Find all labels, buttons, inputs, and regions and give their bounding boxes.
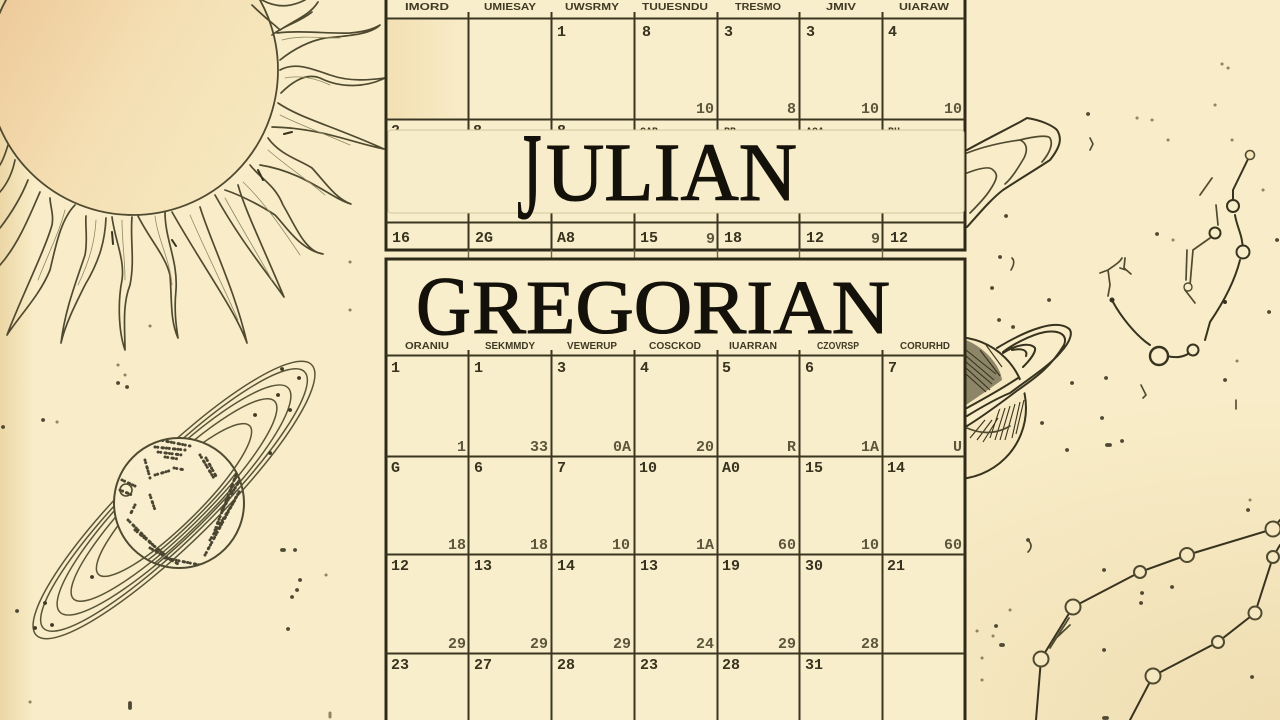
Julian weekday headers: JMIV xyxy=(826,2,856,13)
Gregorian day numbers: 6 xyxy=(805,360,814,377)
Julian day numbers xyxy=(391,24,962,140)
Gregorian weekday headers: CZOVRSP xyxy=(817,341,859,352)
Gregorian day numbers: A0 xyxy=(722,460,740,477)
Julian day numbers: 8 xyxy=(557,123,566,140)
Julian day numbers: 3 xyxy=(806,24,815,41)
Julian day numbers: 8 xyxy=(642,24,651,41)
Gregorian day numbers: 24 xyxy=(696,636,714,653)
panel: Julian calendar xyxy=(386,0,965,258)
Gregorian day numbers: 12 xyxy=(391,558,409,575)
Gregorian weekday headers: ORANIU xyxy=(405,341,449,352)
Julian weekday headers: UIARAW xyxy=(899,2,950,13)
Gregorian day numbers: 27 xyxy=(474,657,492,674)
Gregorian weekday headers: VEWERUP xyxy=(567,341,617,352)
Gregorian day numbers: 7 xyxy=(557,460,566,477)
Gregorian title: G xyxy=(416,260,471,353)
Gregorian day numbers: 13 xyxy=(474,558,492,575)
panel: Gregorian calendar xyxy=(386,259,965,720)
Gregorian day numbers: 10 xyxy=(639,460,657,477)
Gregorian day numbers: 60 xyxy=(944,537,962,554)
Gregorian day numbers: 6 xyxy=(474,460,483,477)
Julian day numbers: CAB xyxy=(640,127,658,138)
Gregorian day numbers: 18 xyxy=(448,537,466,554)
Julian lower row numbers: 12 xyxy=(890,230,908,247)
icon: constellation, upper right xyxy=(1100,150,1254,365)
Gregorian day numbers: 4 xyxy=(640,360,649,377)
Gregorian day numbers: 29 xyxy=(613,636,631,653)
Gregorian day numbers: 1 xyxy=(457,439,466,456)
Gregorian day numbers: 1 xyxy=(474,360,483,377)
Julian title banner xyxy=(388,107,964,245)
Julian lower row numbers: 12 xyxy=(806,230,824,247)
Gregorian day numbers: 29 xyxy=(530,636,548,653)
icon: ringed planet behind Gregorian calendar xyxy=(966,324,1072,480)
Gregorian day numbers: 14 xyxy=(887,460,905,477)
Gregorian day numbers: 0A xyxy=(613,439,631,456)
Gregorian day numbers: 20 xyxy=(696,439,714,456)
Gregorian day numbers: 23 xyxy=(640,657,658,674)
Gregorian day numbers: 21 xyxy=(887,558,905,575)
Julian day numbers: 10 xyxy=(944,101,962,118)
Gregorian day numbers: 28 xyxy=(722,657,740,674)
Gregorian day numbers: 13 xyxy=(640,558,658,575)
Julian lower row numbers: 9 xyxy=(706,231,715,248)
Julian weekday headers: TRESMO xyxy=(735,2,781,13)
Gregorian day numbers: 10 xyxy=(612,537,630,554)
Gregorian day numbers: 33 xyxy=(530,439,548,456)
Gregorian day numbers: G xyxy=(391,460,400,477)
Julian grid lines xyxy=(386,12,965,250)
first empty cell shading xyxy=(388,20,467,118)
Gregorian day numbers xyxy=(391,360,962,674)
Julian day numbers: RB xyxy=(724,127,736,138)
Julian lower row numbers: 2G xyxy=(475,230,493,247)
Gregorian day numbers: 29 xyxy=(778,636,796,653)
Julian day numbers: AOA xyxy=(806,127,824,138)
Julian title banner: J xyxy=(517,107,542,245)
Gregorian weekday headers: SEKMMDY xyxy=(485,341,535,352)
Julian day numbers: 8 xyxy=(787,101,796,118)
icon: ringed planet, lower left xyxy=(32,360,316,640)
Julian day numbers: 3 xyxy=(724,24,733,41)
Gregorian day numbers: 23 xyxy=(391,657,409,674)
Julian weekday headers: UMIESAY xyxy=(484,2,536,13)
Julian weekday headers: UWSRMY xyxy=(565,2,619,13)
Gregorian day numbers: 30 xyxy=(805,558,823,575)
Gregorian day numbers: 28 xyxy=(557,657,575,674)
Gregorian day numbers: 31 xyxy=(805,657,823,674)
Gregorian day numbers: U xyxy=(953,439,962,456)
Julian lower row numbers: 15 xyxy=(640,230,658,247)
Julian weekday headers: IMORD xyxy=(405,2,449,13)
Julian day numbers: 4 xyxy=(888,24,897,41)
Julian lower row numbers: A8 xyxy=(557,230,575,247)
Julian day numbers: 10 xyxy=(861,101,879,118)
Julian weekday headers xyxy=(405,2,950,13)
Gregorian day numbers: 19 xyxy=(722,558,740,575)
Gregorian day numbers: 14 xyxy=(557,558,575,575)
Julian weekday headers: TUUESNDU xyxy=(642,2,708,13)
Gregorian day numbers: 7 xyxy=(888,360,897,377)
Julian day numbers: 1 xyxy=(557,24,566,41)
Julian day numbers: 2 xyxy=(391,123,400,140)
Gregorian weekday headers: CORURHD xyxy=(900,341,950,352)
Gregorian title: REGORIAN xyxy=(472,266,890,350)
Gregorian day numbers: 3 xyxy=(557,360,566,377)
icon: sun with wavy rays xyxy=(0,0,385,350)
Gregorian weekday headers xyxy=(405,341,950,352)
icon: ringed planet behind Julian calendar xyxy=(967,118,1060,227)
Gregorian day numbers: R xyxy=(787,439,796,456)
Gregorian weekday headers: COSCKOD xyxy=(649,341,701,352)
Gregorian day numbers: 1A xyxy=(861,439,879,456)
Gregorian day numbers: 1 xyxy=(391,360,400,377)
Julian day numbers: 10 xyxy=(696,101,714,118)
Julian day numbers: 8 xyxy=(473,123,482,140)
Gregorian day numbers: 5 xyxy=(722,360,731,377)
Julian lower row numbers: 16 xyxy=(392,230,410,247)
Julian title banner: ULIAN xyxy=(546,126,797,218)
Julian lower row numbers xyxy=(392,230,908,248)
Gregorian day numbers: 1A xyxy=(696,537,714,554)
Gregorian day numbers: 10 xyxy=(861,537,879,554)
Gregorian day numbers: 18 xyxy=(530,537,548,554)
Gregorian day numbers: 15 xyxy=(805,460,823,477)
Gregorian grid lines xyxy=(386,350,965,720)
Julian day numbers: BH xyxy=(888,127,900,138)
Gregorian day numbers: 29 xyxy=(448,636,466,653)
Julian lower row numbers: 18 xyxy=(724,230,742,247)
Gregorian weekday headers: IUARRAN xyxy=(729,341,777,352)
icon: constellation, lower right xyxy=(1034,520,1280,720)
Gregorian day numbers: 60 xyxy=(778,537,796,554)
Gregorian day numbers: 28 xyxy=(861,636,879,653)
Julian lower row numbers: 9 xyxy=(871,231,880,248)
